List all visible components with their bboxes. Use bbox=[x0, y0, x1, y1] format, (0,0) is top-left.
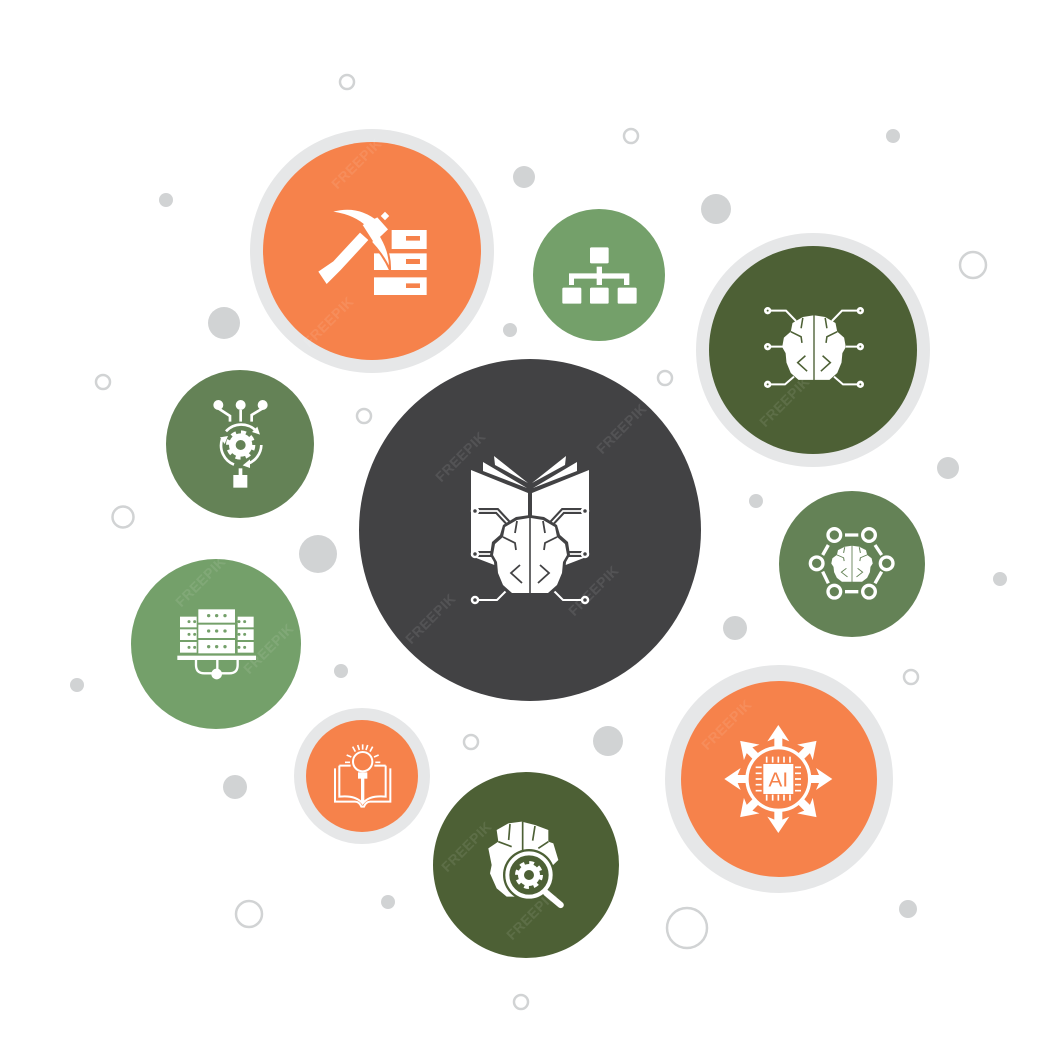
bubble: dark green brain search bbox=[433, 772, 619, 958]
watermark text: FREEPIK bbox=[593, 400, 650, 457]
watermark text: FREEPIK bbox=[698, 696, 755, 753]
decorative hollow rings bbox=[96, 75, 986, 1009]
icon: AI chip with arrows bbox=[724, 725, 832, 833]
bubble: dark green circuit brain bbox=[696, 233, 930, 467]
icon: open book with light bulb bbox=[335, 744, 390, 807]
icon: hierarchy chart bbox=[562, 247, 637, 304]
icon: server racks bbox=[177, 609, 256, 679]
icon: gear with inputs and output bbox=[213, 400, 268, 488]
book pages bbox=[471, 456, 589, 566]
bubble: central book brain bbox=[359, 359, 701, 701]
icon: brain with magnifier gear bbox=[488, 822, 561, 905]
brain bbox=[490, 515, 570, 596]
watermark text: FREEPIK bbox=[503, 886, 560, 943]
watermark text bbox=[172, 135, 813, 943]
bubble: orange book idea bbox=[294, 708, 430, 844]
watermark text: FREEPIK bbox=[438, 818, 495, 875]
decorative solid dots bbox=[70, 129, 1007, 918]
icon: brain with circuits bbox=[765, 308, 863, 387]
watermark text: FREEPIK bbox=[402, 590, 459, 647]
bubble: light green hierarchy bbox=[533, 209, 665, 341]
icon: AI chip with arrows: AI bbox=[769, 768, 788, 791]
bubble: mid green network brain bbox=[779, 491, 925, 637]
circuit lines bbox=[472, 508, 588, 603]
watermark text: FREEPIK bbox=[565, 562, 622, 619]
watermark text: FREEPIK bbox=[172, 553, 229, 610]
icon: brain in hexagon network bbox=[810, 529, 893, 598]
watermark text: FREEPIK bbox=[300, 293, 357, 350]
icon: pickaxe and data servers bbox=[318, 210, 427, 295]
bubble: orange AI chip bbox=[665, 665, 893, 893]
icon: open book with circuit brain bbox=[471, 456, 589, 603]
bubble: orange pickaxe bbox=[250, 129, 494, 373]
watermark text: FREEPIK bbox=[240, 620, 297, 677]
watermark text: FREEPIK bbox=[756, 373, 813, 430]
bubble: mid green gear process bbox=[166, 370, 314, 518]
bubble: light green data center bbox=[131, 559, 301, 729]
watermark text: FREEPIK bbox=[432, 428, 489, 485]
watermark text: FREEPIK bbox=[328, 135, 385, 192]
